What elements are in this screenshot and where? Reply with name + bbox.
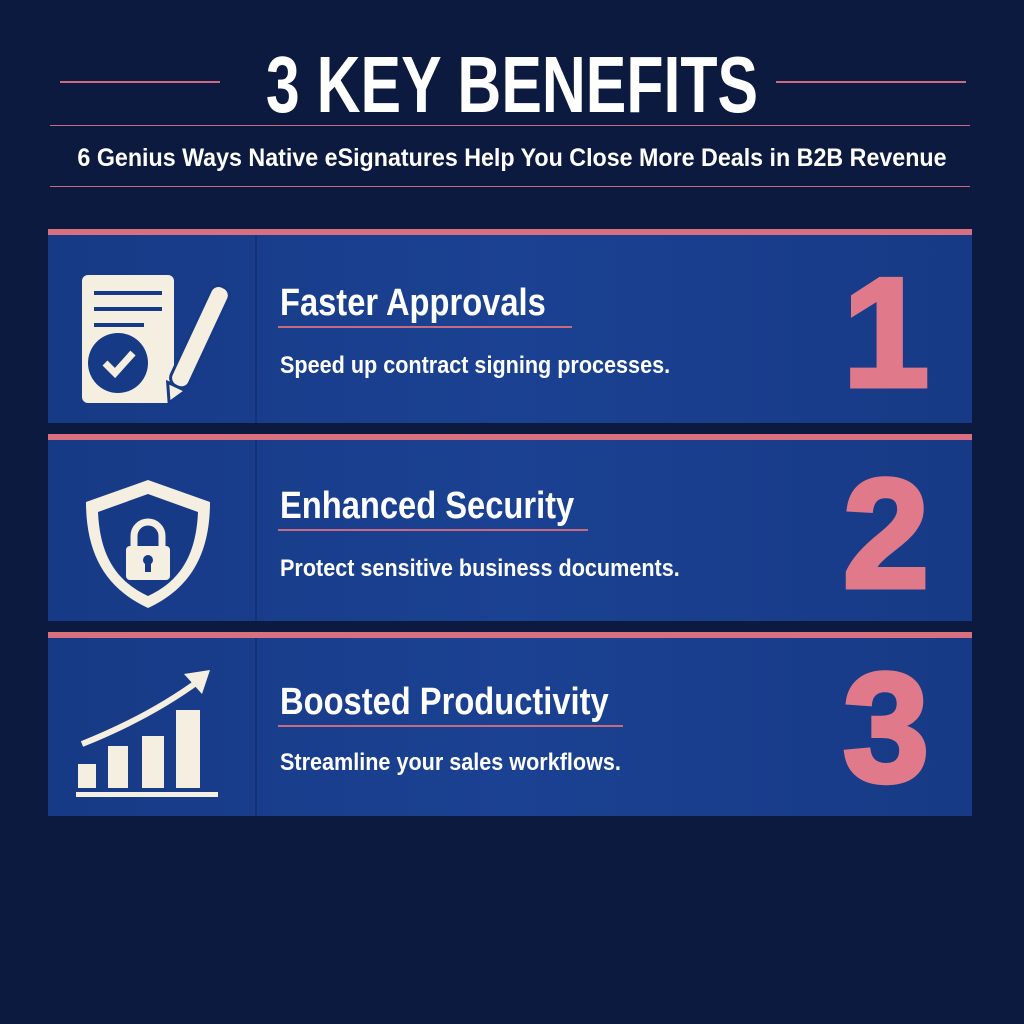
heading: Faster Approvals — [280, 282, 546, 324]
icon: shield lock — [86, 480, 210, 608]
title: 3 KEY BENEFITS — [266, 40, 758, 129]
panel: boosted productivity — [48, 632, 972, 816]
description: Protect sensitive business documents. — [280, 555, 680, 582]
number 3: 3 — [843, 641, 929, 814]
panel: enhanced security — [48, 434, 972, 621]
panel: faster approvals — [48, 229, 972, 423]
number 2: 2 — [843, 447, 929, 620]
icon: document with pen — [82, 275, 228, 403]
heading: Enhanced Security — [280, 485, 574, 527]
number 1: 1 — [843, 246, 929, 419]
heading: Boosted Productivity — [280, 681, 609, 723]
icon: rising bar chart — [76, 670, 218, 797]
description: Speed up contract signing processes. — [280, 352, 670, 379]
description: Streamline your sales workflows. — [280, 749, 621, 776]
subtitle: 6 Genius Ways Native eSignatures Help You Close More Deals in B2B Revenue — [77, 144, 947, 172]
